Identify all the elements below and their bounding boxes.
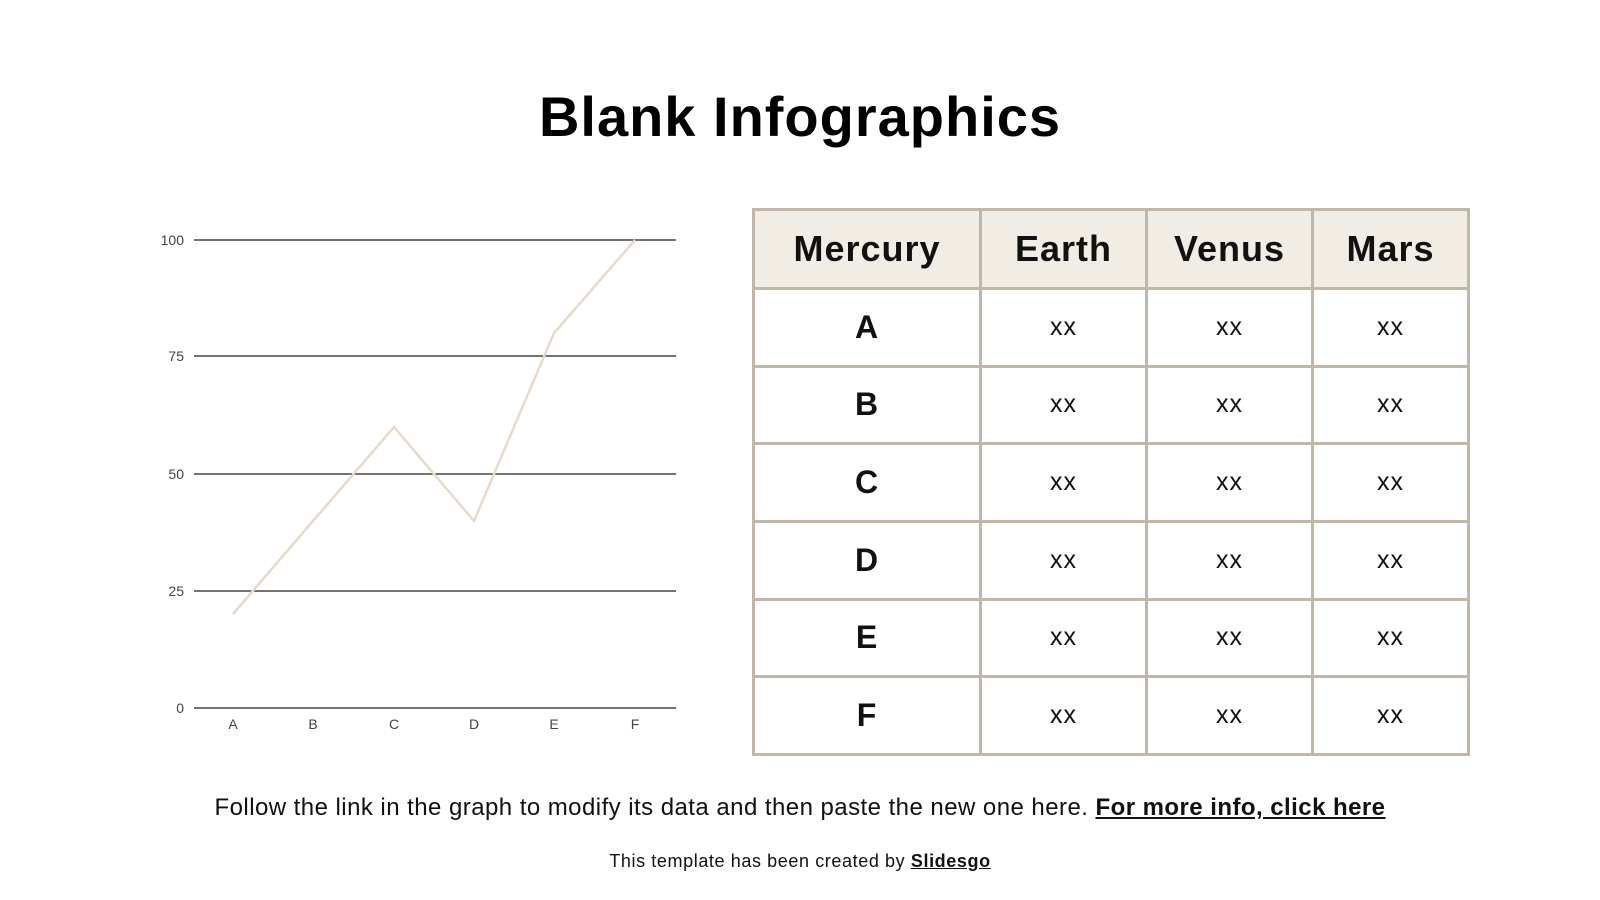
data table: Mercury xyxy=(793,228,941,269)
data table: xx xyxy=(1050,390,1077,418)
data table: xx xyxy=(1216,701,1243,729)
data table: B xyxy=(855,386,879,422)
data table: xx xyxy=(1377,313,1404,341)
line chart: D xyxy=(469,716,479,732)
line chart: F xyxy=(631,716,639,732)
data table: xx xyxy=(1216,468,1243,496)
data table xyxy=(752,208,1470,756)
data table: xx xyxy=(1050,701,1077,729)
data table: xx xyxy=(1377,390,1404,418)
data line xyxy=(233,240,635,614)
data table: Mars xyxy=(1346,228,1435,269)
data table: E xyxy=(856,619,878,655)
line chart: 100 xyxy=(161,232,184,248)
data table: xx xyxy=(1216,623,1243,651)
data table: F xyxy=(857,697,877,733)
data table: C xyxy=(855,464,879,500)
line chart xyxy=(161,232,676,732)
data table: xx xyxy=(1377,701,1404,729)
data table: D xyxy=(855,542,879,578)
footer note: Follow the link in the graph to modify its data and then paste the new one here. For more info, click here xyxy=(214,794,1385,821)
data table: xx xyxy=(1216,390,1243,418)
line chart: 50 xyxy=(168,466,184,482)
credit: This template has been created by Slidesgo xyxy=(609,851,991,871)
data table: Earth xyxy=(1015,228,1112,269)
data table: xx xyxy=(1216,546,1243,574)
data table: xx xyxy=(1377,468,1404,496)
data table: xx xyxy=(1050,623,1077,651)
line chart: 75 xyxy=(168,348,184,364)
data table: xx xyxy=(1050,313,1077,341)
data table: xx xyxy=(1377,546,1404,574)
line chart: C xyxy=(389,716,399,732)
line chart: 0 xyxy=(176,700,184,716)
data table: xx xyxy=(1050,546,1077,574)
line chart: A xyxy=(228,716,238,732)
line chart: 25 xyxy=(168,583,184,599)
title: Blank Infographics xyxy=(539,85,1061,148)
line chart: E xyxy=(549,716,559,732)
line chart: B xyxy=(308,716,318,732)
data table: xx xyxy=(1216,313,1243,341)
data table: xx xyxy=(1377,623,1404,651)
data table: xx xyxy=(1050,468,1077,496)
data table: Venus xyxy=(1174,228,1285,269)
data table: A xyxy=(855,309,879,345)
